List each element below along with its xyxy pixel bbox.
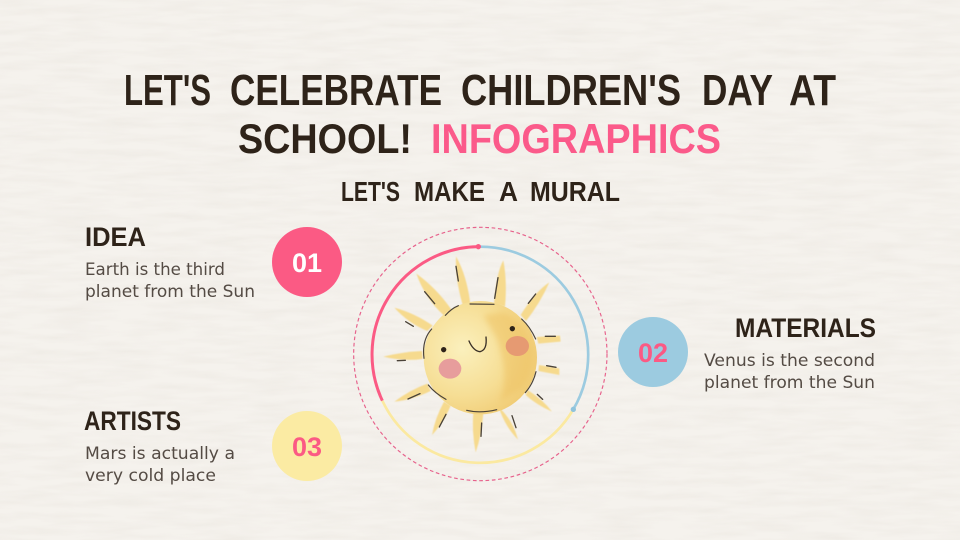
sun rays	[383, 256, 561, 452]
title: LET'S	[124, 66, 211, 115]
ring segment: pink	[372, 244, 481, 401]
subtitle	[341, 176, 620, 207]
heading: artists: ARTISTS	[84, 406, 181, 436]
body shading	[483, 312, 533, 402]
heading: idea: IDEA	[85, 222, 146, 252]
title: CELEBRATE	[230, 66, 442, 115]
text: materials description: planet from the Sun	[704, 373, 875, 393]
text: materials description: Venus is the second	[704, 351, 875, 371]
dashed outer ring	[354, 227, 607, 481]
diagram: sun with ring	[354, 227, 607, 481]
ring segment: yellow	[382, 401, 573, 463]
badge: 02	[618, 317, 688, 387]
badge: 03: 03	[292, 432, 322, 462]
badge: 01: 01	[292, 248, 322, 278]
sun face	[439, 326, 529, 379]
badge: 02: 02	[638, 338, 668, 368]
panel: materials	[704, 313, 876, 393]
ring segment: blue	[478, 247, 588, 412]
text: idea description: planet from the Sun	[85, 282, 255, 302]
text: artists description: very cold place	[85, 466, 216, 486]
text: artists description	[85, 444, 235, 486]
subtitle: MAKE	[414, 176, 485, 207]
badge: 03	[272, 411, 342, 481]
title: SCHOOL!	[238, 115, 412, 162]
title: DAY	[702, 66, 773, 115]
panel: artists	[84, 406, 235, 486]
text: idea description	[85, 260, 255, 302]
subtitle: LET'S	[341, 176, 400, 207]
text: artists description: Mars is actually a	[85, 444, 235, 464]
text: materials description	[704, 351, 875, 393]
title: AT	[789, 66, 836, 115]
title	[124, 66, 836, 162]
ray ink marks	[397, 266, 556, 436]
icon: sun	[383, 256, 561, 452]
text: idea description: Earth is the third	[85, 260, 225, 280]
body outline marks	[424, 304, 536, 412]
title: INFOGRAPHICS	[431, 115, 721, 162]
subtitle: MURAL	[530, 176, 620, 207]
heading: materials: MATERIALS	[735, 313, 876, 343]
panel: idea	[85, 222, 255, 302]
subtitle: A	[499, 176, 518, 207]
title: CHILDREN'S	[461, 66, 681, 115]
badge: 01	[272, 227, 342, 297]
sun body	[424, 301, 537, 414]
